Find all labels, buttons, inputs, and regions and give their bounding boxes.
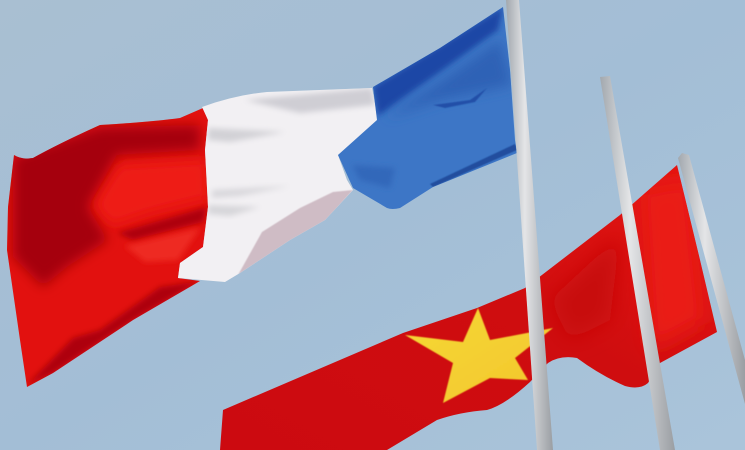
Vietnamese flag: red field (215, 160, 725, 450)
French flag (0, 0, 525, 390)
French flag: blue stripe (338, 7, 516, 209)
French flag: shaded underside (238, 190, 353, 275)
Vietnamese flag (215, 160, 725, 450)
flagpoles (506, 0, 745, 450)
flagpole: middle (600, 76, 675, 450)
icon: yellow star (405, 308, 553, 403)
flagpole: front (506, 0, 553, 450)
French flag: white stripe (178, 88, 377, 282)
flagpole: right (678, 153, 745, 404)
French flag: red stripe (7, 108, 208, 387)
